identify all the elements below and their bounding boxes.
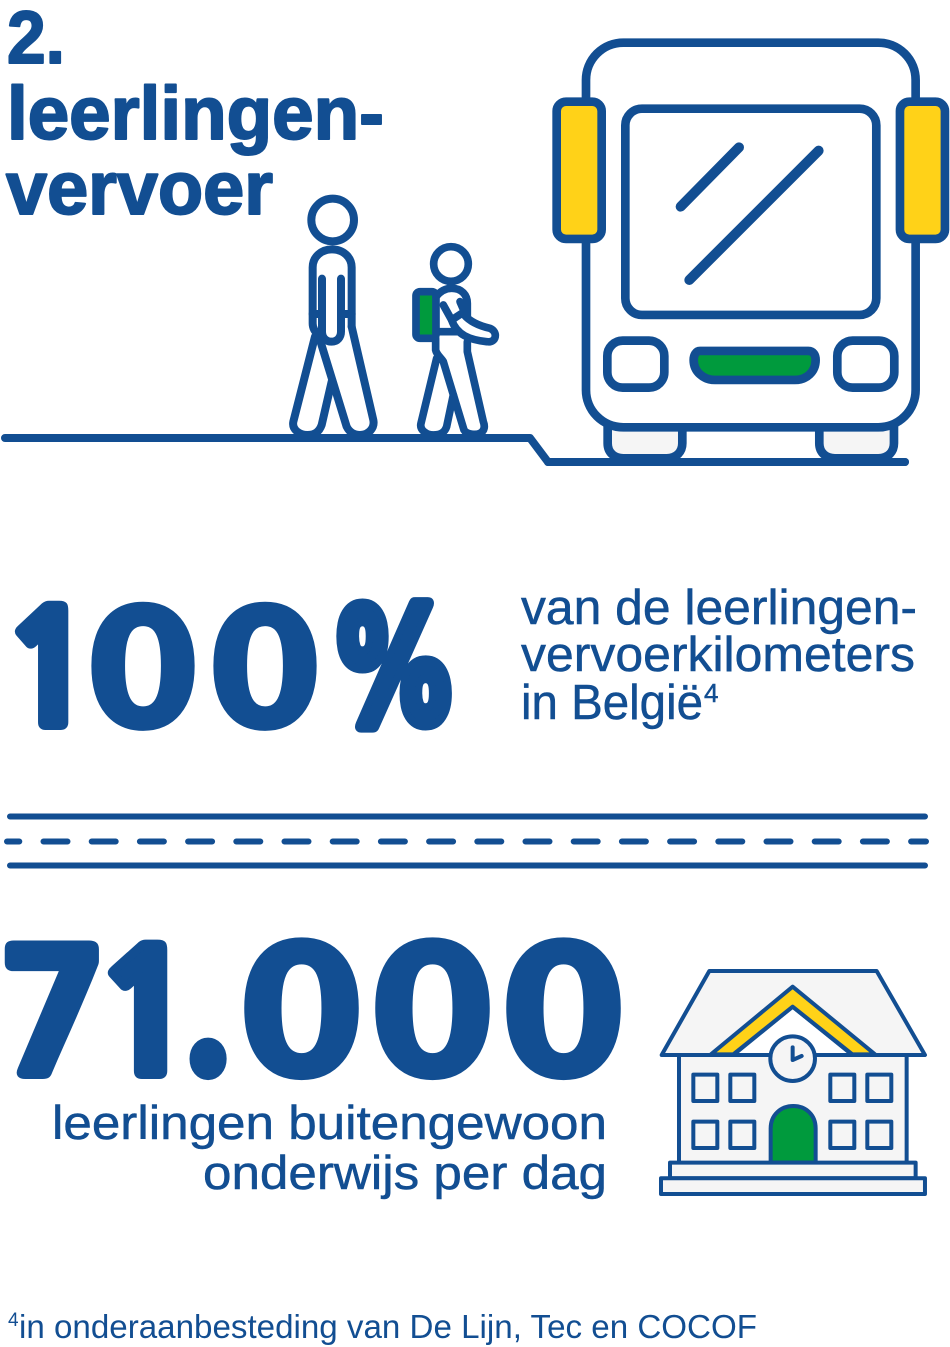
school roof trim [711,987,875,1054]
bus mirrors [557,102,945,239]
title: leerlingen- [7,71,384,155]
footnote: 4 [8,1310,19,1331]
stat: 71.000: 0 [498,860,629,1132]
school door [771,1106,816,1163]
ground line [5,438,905,462]
icon: school [661,971,925,1194]
icon: child with backpack [416,247,495,435]
stat: 71.000: 0 [236,860,367,1132]
bus wheels [608,423,894,458]
road divider [7,816,926,866]
school building [679,1055,907,1163]
stat description: kilometres: 4 [704,678,718,708]
school roof [662,971,925,1055]
stat: 100 percent: % [326,593,460,748]
stat description: pupils: leerlingen buitengewoon [52,1096,607,1149]
bus grille [694,351,816,380]
bus body [586,43,916,427]
icon: bus [557,43,945,458]
stat description: kilometres [521,581,917,730]
stat: 71.000: . [178,860,238,1132]
icon: adult walking [293,199,374,435]
school steps [670,1163,916,1178]
stat description: pupils [52,1096,607,1199]
title: vervoer [6,146,273,230]
stat: 100 percent: 1 [3,593,97,748]
stat: 100 percent: 0 [84,531,202,777]
stat description: kilometres: in België [521,676,703,730]
school clock [770,1036,815,1081]
stat: 100 percent [3,531,460,777]
stat description: kilometres: vervoerkilometers [521,628,915,682]
bus windscreen [625,109,876,315]
stat: 71.000: 1 [94,931,200,1099]
stat description: kilometres: van de leerlingen- [521,581,917,635]
stat: 71.000 [0,860,629,1132]
bus headlights [607,341,664,388]
school windows [693,1075,891,1148]
stat: 71.000: 0 [367,860,498,1132]
ground line under bus [548,458,905,466]
stat: 100 percent: 0 [206,531,324,777]
footnote: in onderaanbesteding van De Lijn, Tec en COCOF [19,1308,757,1345]
stat description: pupils: onderwijs per dag [203,1146,607,1199]
title [6,0,384,230]
icon: backpack [416,292,436,338]
stat: 71.000: 7 [0,931,107,1099]
